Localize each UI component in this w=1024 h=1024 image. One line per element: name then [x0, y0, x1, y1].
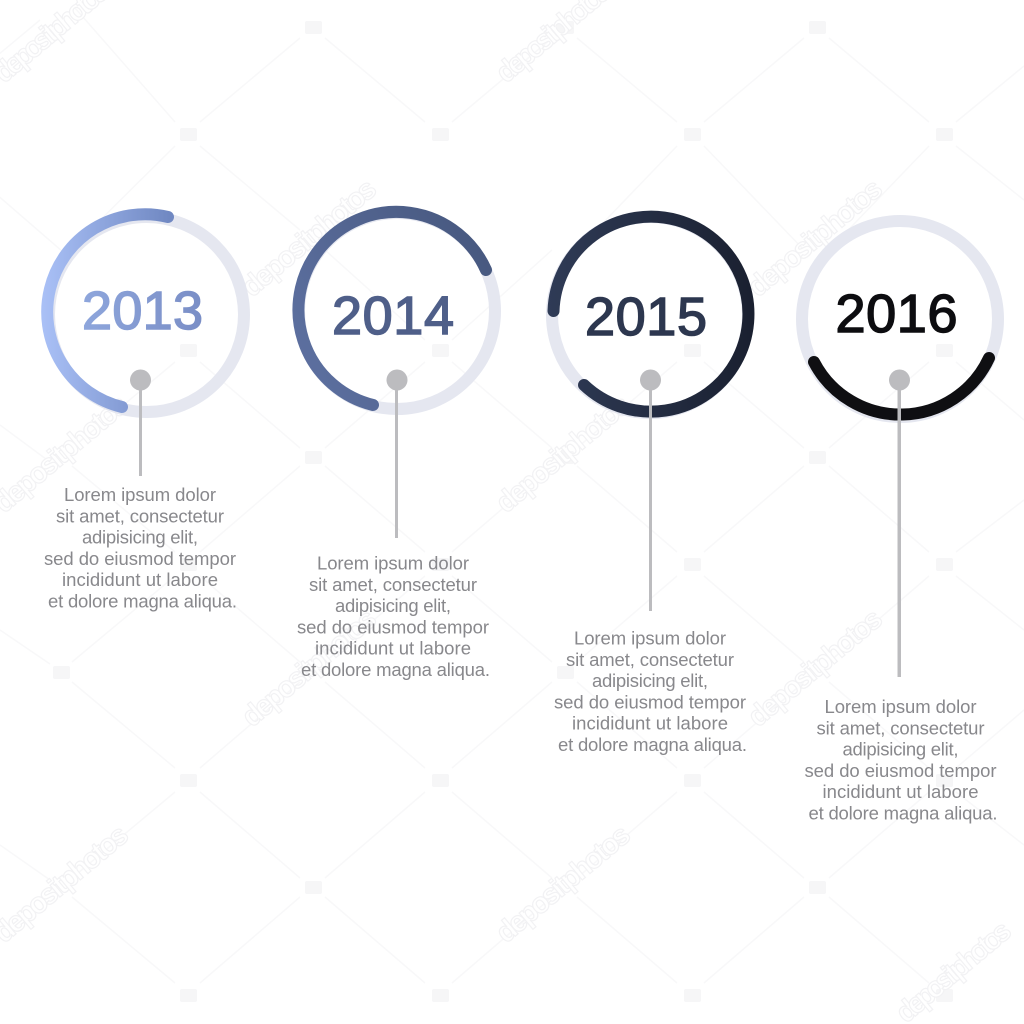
description 2013: adipisicing elit, [82, 527, 198, 548]
panel: 2015 milestone [552, 217, 748, 755]
watermark pattern: depositphotos [490, 389, 637, 519]
description 2013: Lorem ipsum dolor [64, 484, 216, 505]
description 2015 [554, 628, 747, 755]
description 2015: et dolore magna aliqua. [558, 734, 747, 755]
description 2015: Lorem ipsum dolor [574, 628, 726, 648]
year 2016: 2016 [836, 284, 958, 344]
description 2016: adipisicing elit, [842, 739, 958, 760]
progress arc 2013 [47, 214, 168, 407]
description 2015: sed do eiusmod tempor [554, 691, 746, 712]
pin dot 2013 [130, 370, 151, 390]
connector line 2014 [395, 385, 398, 538]
description 2014: et dolore magna aliqua. [301, 659, 490, 680]
panel: 2014 milestone [297, 212, 495, 680]
pin dot 2016 [889, 370, 910, 390]
description 2013: incididunt ut labore [62, 569, 218, 590]
panel: 2016 milestone [802, 221, 998, 824]
connector line 2013 [139, 385, 142, 476]
progress arc 2016 [814, 358, 989, 415]
description 2015: adipisicing elit, [592, 670, 708, 691]
pin dot 2015 [640, 370, 661, 390]
description 2013: sed do eiusmod tempor [44, 548, 236, 569]
description 2013: sit amet, consectetur [56, 505, 224, 526]
year 2014: 2014 [332, 286, 454, 346]
description 2015: incididunt ut labore [572, 713, 728, 734]
watermark pattern: depositphotos [236, 173, 383, 303]
watermark pattern: depositphotos [490, 819, 637, 949]
watermark pattern: depositphotos [742, 173, 889, 303]
panel: 2013 milestone [44, 214, 244, 612]
description 2016: et dolore magna aliqua. [808, 802, 998, 824]
description 2013 [44, 484, 237, 612]
description 2016 [804, 696, 998, 824]
progress arc 2015 [554, 217, 748, 412]
year 2015: 2015 [585, 287, 707, 347]
description 2014: sed do eiusmod tempor [297, 616, 489, 637]
watermark pattern: depositphotos [236, 603, 383, 733]
description 2016: sed do eiusmod tempor [804, 760, 996, 781]
connector line 2016 [898, 385, 901, 677]
description 2015: sit amet, consectetur [566, 649, 734, 670]
description 2016: sit amet, consectetur [816, 717, 984, 738]
year 2013: 2013 [82, 281, 203, 341]
ring track 2014 [299, 213, 495, 409]
connector line 2015 [649, 385, 652, 611]
description 2016: Lorem ipsum dolor [824, 696, 976, 717]
description 2016: incididunt ut labore [822, 781, 978, 802]
ring track 2013 [49, 217, 244, 412]
description 2014: incididunt ut labore [315, 638, 471, 659]
description 2014 [297, 552, 490, 680]
pin dot 2014 [386, 370, 408, 390]
watermark pattern: depositphotos [742, 603, 889, 733]
description 2014: Lorem ipsum dolor [317, 552, 469, 574]
ring track 2016 [802, 221, 998, 417]
description 2014: sit amet, consectetur [309, 574, 477, 595]
description 2014: adipisicing elit, [335, 595, 451, 616]
progress arc 2014 [298, 212, 486, 405]
description 2013: et dolore magna aliqua. [48, 590, 237, 612]
ring track 2015 [552, 217, 748, 413]
